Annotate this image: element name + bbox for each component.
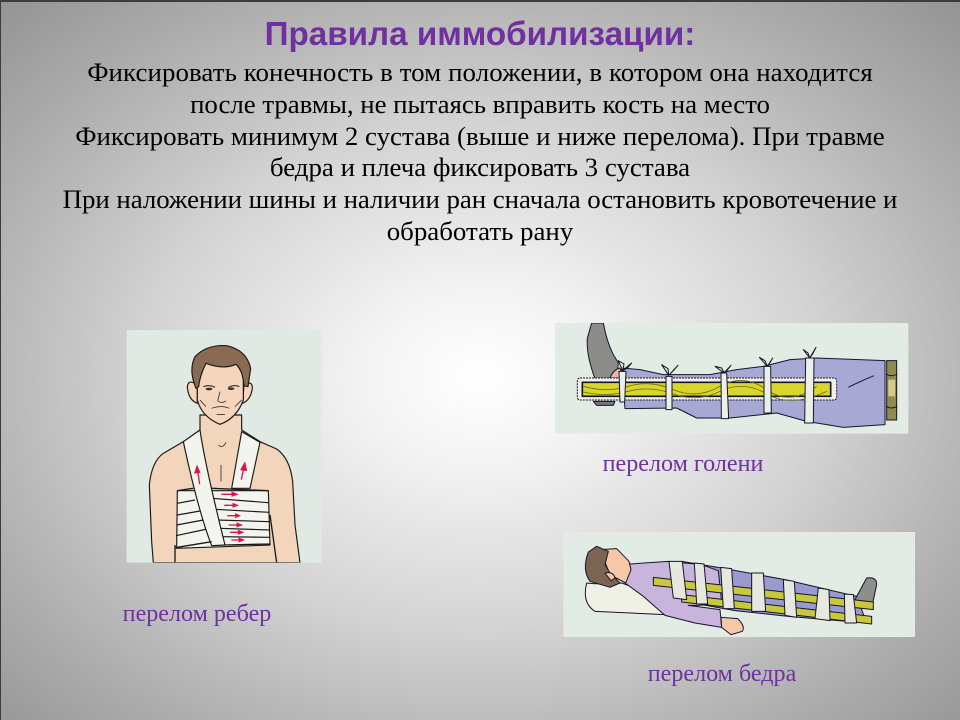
- lower splint: [682, 595, 872, 624]
- belt end: [887, 361, 897, 420]
- illustration: femur fracture full-body splint: [563, 532, 915, 637]
- rules text block: обработать рану: [387, 216, 573, 246]
- splint padding and board: [577, 378, 837, 400]
- rules text block: Фиксировать минимум 2 сустава (выше и ниже перелома). При травме: [75, 121, 885, 151]
- caption: femur fracture: перелом бедра: [648, 661, 796, 687]
- rules text block: При наложении шины и наличии ран сначала остановить кровотечение и: [63, 184, 897, 214]
- caption: lower leg fracture: перелом голени: [603, 451, 763, 477]
- title: Правила иммобилизации:: [265, 16, 695, 53]
- trouser: [622, 358, 885, 427]
- pillow: [585, 583, 665, 615]
- illustration: rib fracture bandage: [127, 330, 322, 563]
- rules text block: после травмы, не пытаясь вправить кость на место: [190, 89, 770, 119]
- upper splint: [653, 577, 873, 610]
- bandages: [669, 561, 687, 600]
- rules text block: бедра и плеча фиксировать 3 сустава: [270, 152, 690, 182]
- bandage ties: [619, 371, 626, 402]
- head: [600, 549, 631, 583]
- hand: [721, 617, 743, 635]
- icon: red arrows: [194, 462, 247, 542]
- shoe: [855, 578, 877, 608]
- shoe: [587, 323, 618, 379]
- illustration: lower leg splint: [555, 323, 908, 434]
- rules text block: Фиксировать конечность в том положении, в котором она находится: [87, 57, 873, 87]
- legs: [682, 561, 867, 623]
- rules text block: [63, 57, 897, 246]
- caption: rib fracture: перелом ребер: [123, 601, 271, 627]
- torso and arm: [625, 561, 722, 627]
